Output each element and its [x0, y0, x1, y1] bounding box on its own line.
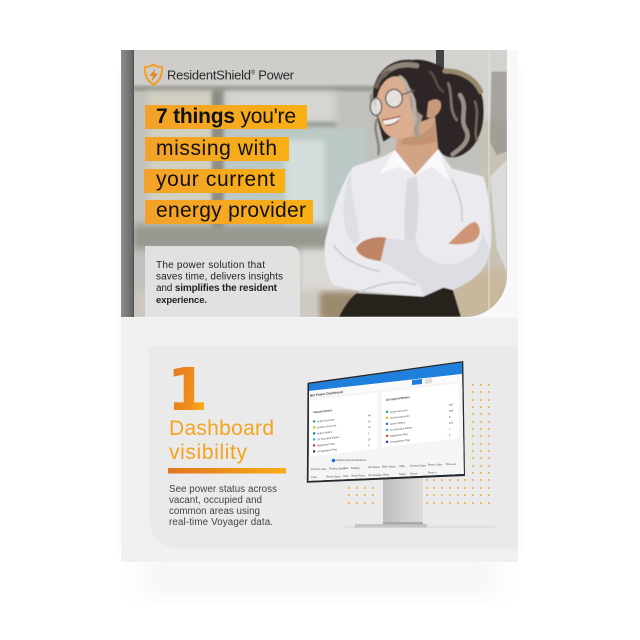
table filters: Property Name	[329, 468, 346, 470]
gradient divider	[168, 468, 286, 474]
card body text: See power status across	[169, 484, 277, 495]
logo: ResidentShield Power: ®	[251, 70, 256, 76]
left status card: 48	[368, 414, 371, 417]
panel: card 1 dashboard visibility: visibility	[169, 441, 248, 464]
left status card: 15	[368, 420, 371, 423]
decorative orange dot grid	[348, 384, 490, 504]
number 1: 1	[167, 355, 208, 424]
left status card: Active Meters	[317, 431, 333, 435]
left status card: 76	[368, 426, 371, 429]
left status card: Vacant Doors	[313, 408, 332, 414]
panel: card 1 dashboard visibility	[149, 346, 518, 549]
right status card: Active Accounts	[390, 409, 408, 414]
table filters: Units	[343, 467, 349, 470]
card body text: vacant, occupied and	[169, 495, 262, 506]
card body text: real-time Voyager data.	[169, 517, 273, 528]
left status card: Unregistered Flag	[317, 448, 337, 453]
table filters: Meter	[383, 474, 389, 476]
monitor illustration	[307, 361, 495, 528]
left status card	[310, 393, 377, 457]
right status card: Unregistered Flag	[390, 438, 410, 444]
card body text	[169, 484, 277, 528]
right status card: 240	[449, 421, 454, 425]
right status card: 6	[449, 434, 451, 437]
shirt	[325, 149, 491, 297]
forearms	[356, 237, 386, 261]
left status card: 9	[368, 444, 370, 447]
table filters: Utility	[399, 465, 406, 468]
table filters: Move-in Date	[428, 464, 443, 466]
heading: 7 things you're missing with your current energy provider	[144, 105, 313, 224]
left status card: 20	[368, 438, 371, 441]
logo: ResidentShield Power	[145, 64, 295, 84]
highlight line 1: 7 things you're	[156, 105, 296, 128]
right status card: 298	[449, 409, 454, 413]
highlight line 4: energy provider	[156, 199, 306, 222]
callout: power solution	[145, 246, 300, 317]
callout: power solution: experience.	[156, 295, 207, 306]
neck	[395, 117, 438, 176]
table filters: Supplemental Identifications	[336, 459, 367, 462]
photo: woman with crossed arms	[325, 50, 507, 317]
right status card: 7	[449, 428, 451, 431]
right status card: 8	[449, 416, 451, 419]
table filters: Vacant	[410, 472, 418, 476]
icon: shield	[145, 64, 162, 84]
left status card: On Standard Meters	[317, 436, 340, 441]
hair back	[373, 60, 484, 157]
left status card: Registered Flag	[317, 442, 335, 447]
toolbar buttons	[412, 379, 422, 385]
right status card: Registered Flag	[390, 433, 408, 438]
monitor screen: dashboard	[308, 362, 464, 481]
right status card: Occupied Meters	[386, 395, 410, 402]
page background	[121, 50, 518, 562]
dashboard title: Bill Power Dashboard	[310, 390, 343, 398]
photo: blurred office background	[121, 50, 508, 320]
table filters: Move In	[428, 472, 437, 474]
table filters: Property Code	[311, 468, 327, 471]
right status card: On Standard Meters	[390, 426, 413, 432]
left page stripe	[121, 50, 134, 317]
glass reflection	[488, 50, 490, 310]
monitor stand	[355, 476, 427, 528]
table filters	[311, 459, 456, 479]
highlight line 2: missing with	[156, 137, 277, 160]
table filters: Units	[343, 475, 349, 478]
table filters: Account Status	[410, 464, 427, 468]
page drop shadow	[116, 70, 523, 592]
left status card: 3	[368, 432, 370, 435]
table filters: Vacant Active	[351, 474, 366, 478]
card heading: Dashboard	[169, 417, 274, 440]
logo: ResidentShield Power: Power	[255, 68, 295, 82]
monitor frame	[307, 361, 465, 483]
table filters: Unit Status	[368, 466, 380, 469]
table filters: Meter Status	[382, 466, 396, 468]
blue header	[309, 362, 462, 391]
callout: power solution: saves time, delivers insights	[156, 272, 283, 282]
pants	[339, 288, 461, 317]
table filters: Vendor Name	[326, 476, 341, 478]
callout: power solution: and simplifies the resident	[156, 283, 278, 294]
curls	[371, 65, 481, 154]
table filters: Unit Register	[368, 474, 382, 477]
left status card: Inactive Accounts	[317, 424, 337, 429]
right status card: 287	[449, 403, 454, 407]
table filters: Status	[399, 473, 407, 476]
glasses	[370, 89, 402, 115]
monitor base shadow	[345, 526, 495, 528]
table filters: Move-out	[446, 463, 456, 466]
face	[376, 76, 418, 139]
panel: hero photo	[121, 50, 508, 320]
callout: power solution: The power solution that	[156, 260, 265, 271]
left status card: Active Accounts	[317, 418, 335, 423]
logo: ResidentShield Power: ResidentShield	[167, 68, 251, 82]
card body text: common areas using	[169, 506, 260, 517]
highlight line 3: your current	[156, 168, 275, 191]
infographic page mockup	[121, 50, 518, 584]
right status card: Active Meters	[390, 421, 406, 426]
right status card	[382, 383, 459, 447]
right status card: Inactive Accounts	[390, 415, 410, 420]
table filters: Code	[311, 476, 317, 479]
table filters: Building	[351, 467, 360, 470]
